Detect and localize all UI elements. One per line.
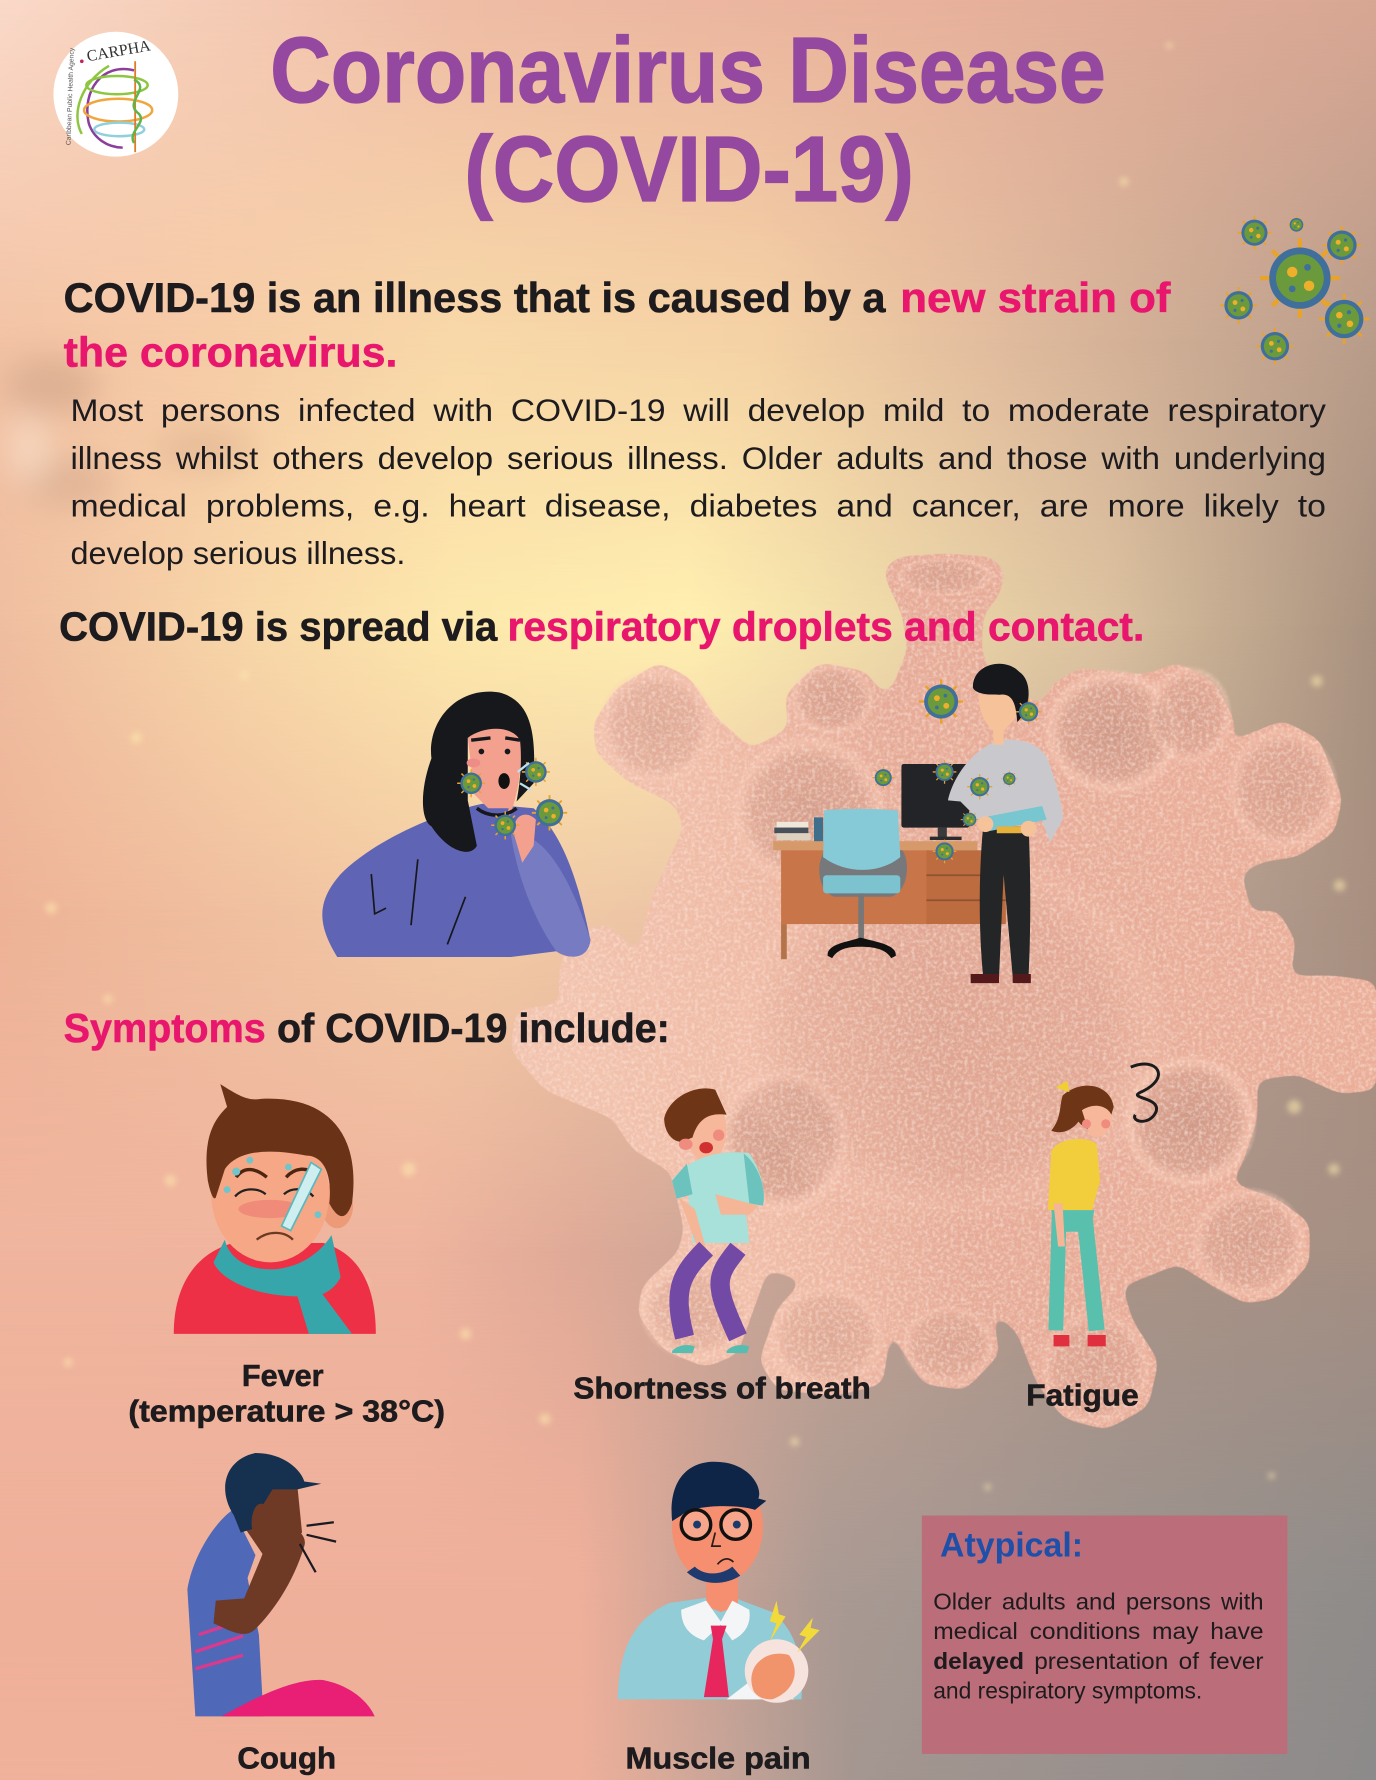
- title: [270, 18, 1106, 221]
- callout text: and respiratory symptoms.: [933, 1677, 1202, 1703]
- illustration: woman coughing: [322, 692, 590, 957]
- callout text: [933, 1589, 1264, 1703]
- title: (COVID-19): [464, 117, 914, 221]
- heading: what is COVID-19: new strain of: [900, 274, 1172, 321]
- chair: [819, 809, 907, 958]
- title: Coronavirus Disease: [270, 18, 1106, 122]
- heading: how it spreads: [59, 603, 1144, 649]
- large coronavirus background image: [511, 554, 1376, 1429]
- heading: how it spreads: respiratory droplets and contact.: [508, 603, 1144, 649]
- callout text: medical conditions may have: [933, 1618, 1264, 1644]
- paragraph: severity: Most persons infected with COVID-19 will develop mild to moderate respiratory: [70, 392, 1326, 428]
- paragraph: severity: [70, 392, 1326, 571]
- callout text: Older adults and persons with: [933, 1589, 1264, 1615]
- surface lobes: [597, 556, 1340, 1427]
- label: muscle pain: Muscle pain: [626, 1742, 811, 1776]
- logo rings: [77, 61, 152, 152]
- callout text: delayed: [933, 1648, 1024, 1674]
- callout text: presentation of fever: [1034, 1648, 1264, 1674]
- label: cough: Cough: [237, 1742, 336, 1776]
- illustration: man at desk with contaminated surfaces: [773, 664, 1063, 983]
- heading: what is COVID-19: the coronavirus.: [64, 329, 397, 376]
- heading: symptoms: [64, 1005, 670, 1051]
- heading: what is COVID-19: COVID-19 is an illness that is caused by a: [64, 274, 886, 321]
- paragraph: severity: develop serious illness.: [70, 535, 405, 571]
- symptom: fever: [174, 1084, 376, 1334]
- paragraph: severity: illness whilst others develop serious illness. Older adults and those with underlying: [70, 440, 1326, 476]
- desk: [773, 817, 1006, 959]
- label: shortness of breath: Shortness of breath: [573, 1372, 871, 1406]
- surface virus particles: [872, 679, 1041, 863]
- label: fever: [128, 1359, 445, 1428]
- heading: how it spreads: COVID-19 is spread via: [59, 603, 498, 649]
- paragraph: severity: medical problems, e.g. heart disease, diabetes and cancer, are more likely to: [70, 488, 1326, 524]
- label: fever: (temperature > 38°C): [128, 1394, 445, 1428]
- callout heading: Atypical:: [940, 1526, 1083, 1564]
- label: fatigue: Fatigue: [1026, 1378, 1139, 1412]
- virus silhouette: [511, 554, 1376, 1429]
- man: [948, 664, 1063, 983]
- heading: what is COVID-19: [64, 274, 1172, 376]
- heading: symptoms: of COVID-19 include:: [277, 1005, 670, 1051]
- symptom: muscle pain: [618, 1462, 820, 1703]
- symptom: fatigue: [1048, 1064, 1158, 1346]
- symptom: cough: [187, 1453, 375, 1716]
- label: fever: Fever: [242, 1359, 324, 1393]
- logo: CARPHA: [53, 32, 178, 157]
- callout: atypical presentation: [922, 1515, 1287, 1754]
- monitor: [901, 764, 970, 840]
- icon: virus cluster: [1220, 216, 1369, 365]
- logo name: CARPHA: [85, 37, 152, 65]
- logo tagline: Caribbean Public Health Agency: [65, 47, 76, 145]
- symptom: shortness of breath: [664, 1088, 764, 1353]
- heading: symptoms: Symptoms: [64, 1005, 266, 1051]
